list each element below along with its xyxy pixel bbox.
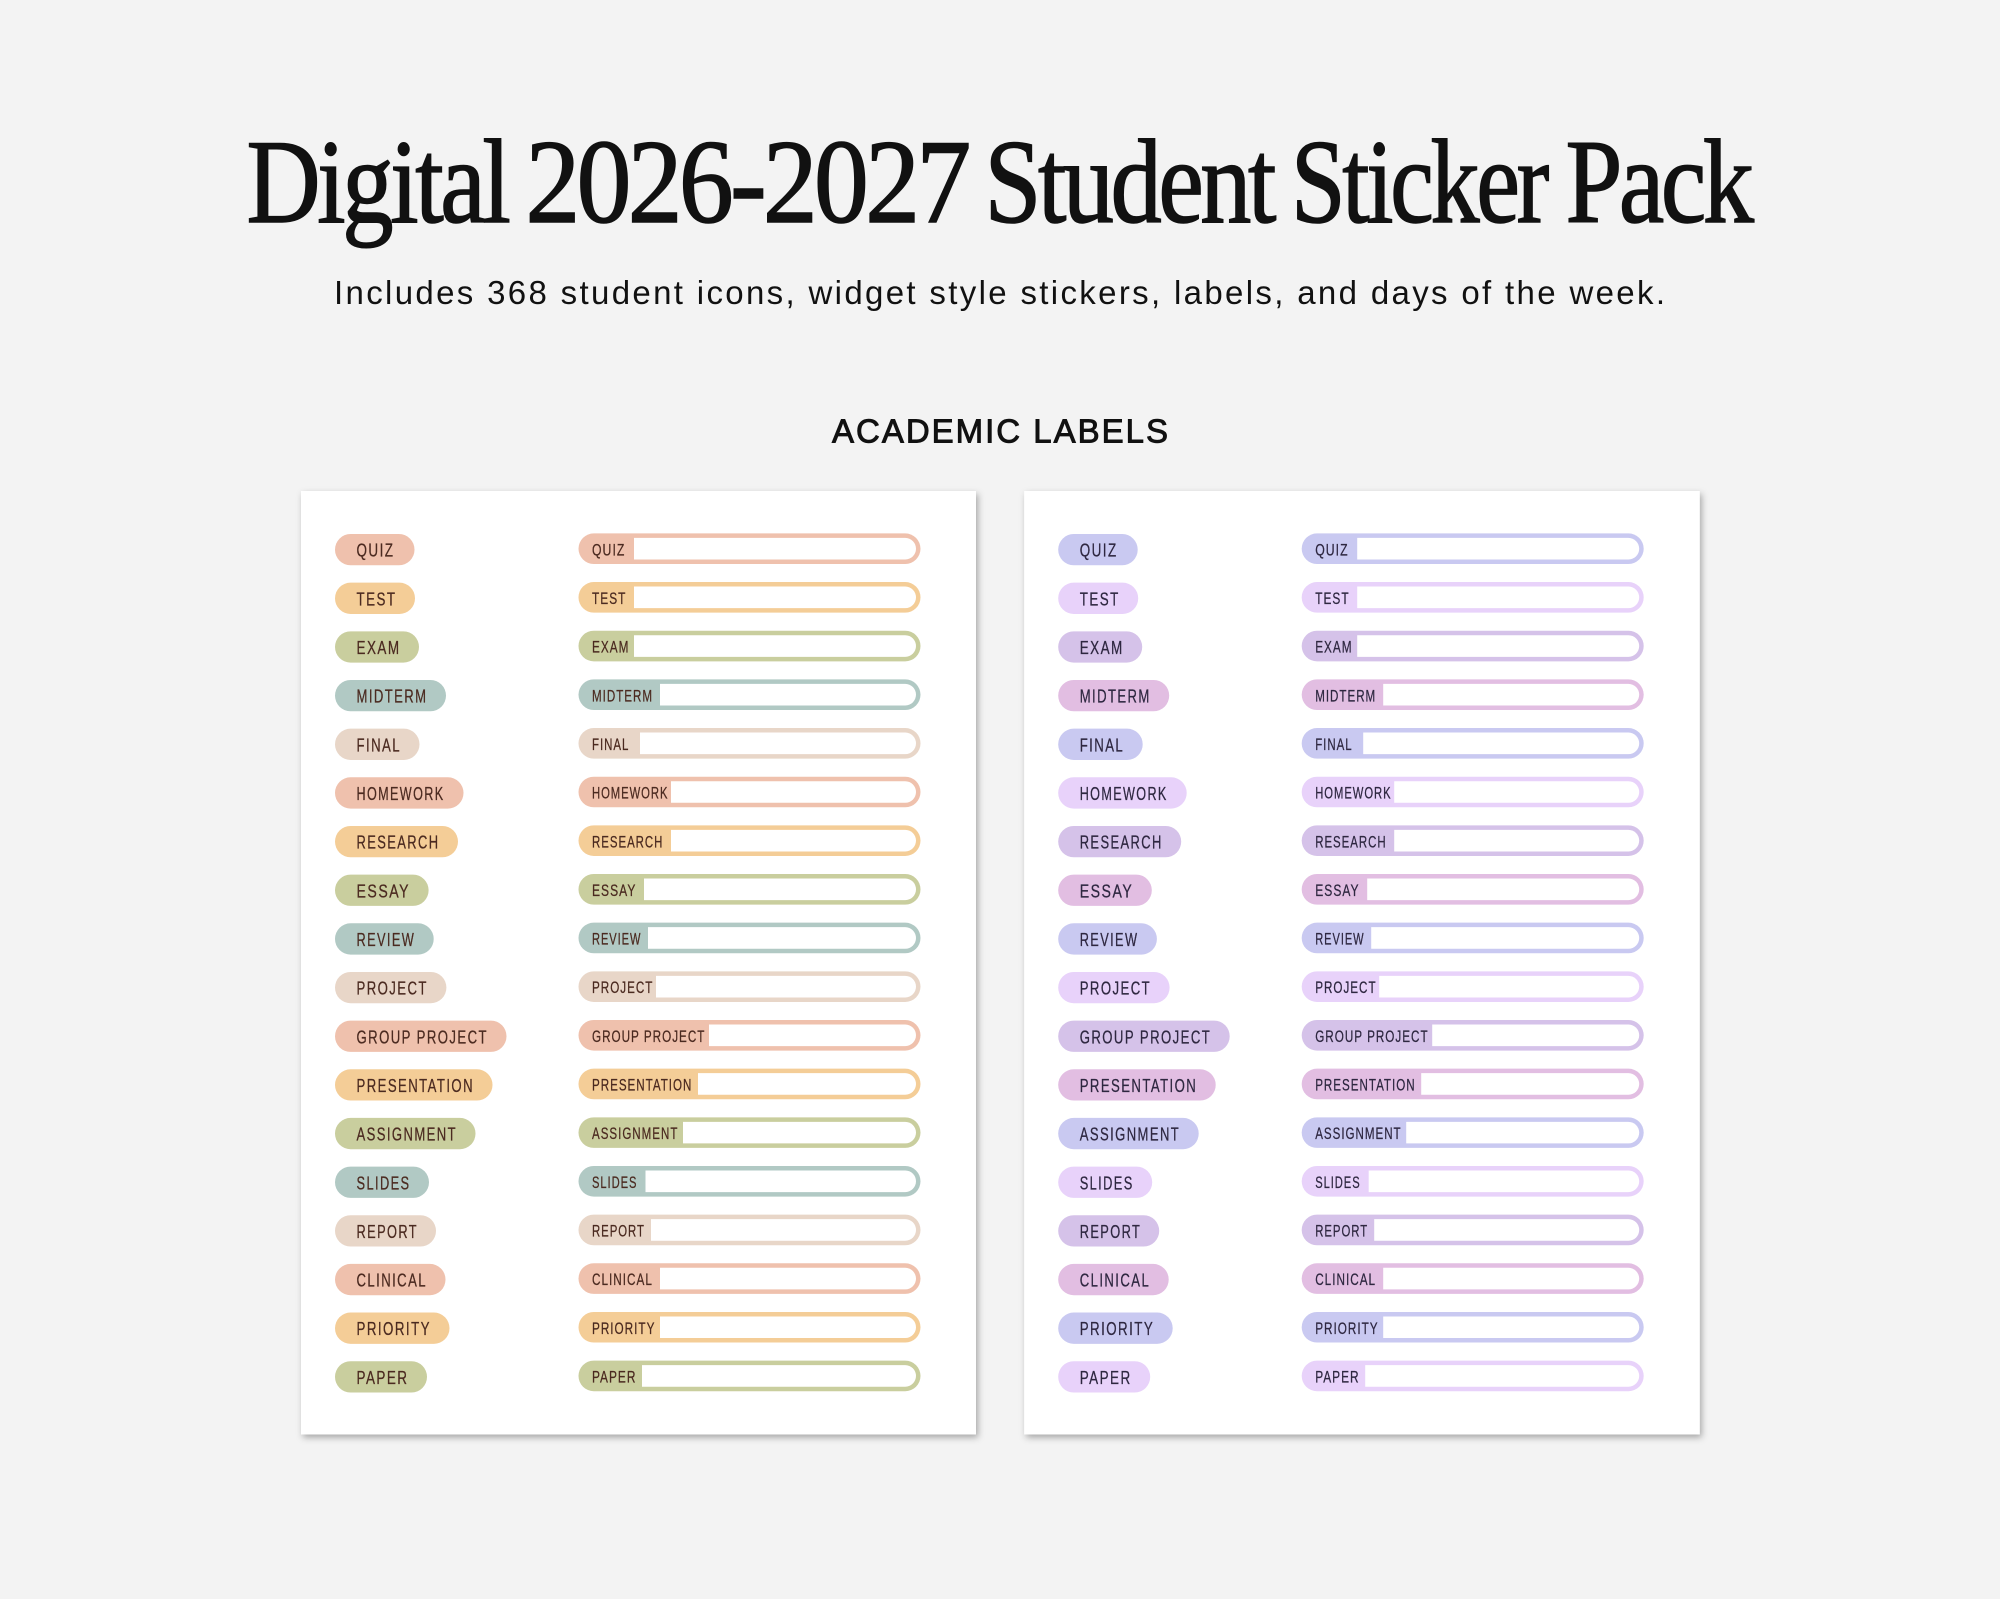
pill: FINAL: FINAL (1080, 734, 1124, 755)
bar: PROJECT: PROJECT (1315, 979, 1377, 997)
bar: CLINICAL: CLINICAL (1315, 1271, 1376, 1289)
pill: TEST (335, 583, 415, 614)
bar: MIDTERM (578, 679, 920, 710)
bar: ASSIGNMENT (578, 1117, 920, 1148)
title: Pack (1566, 115, 1754, 248)
bar: CLINICAL (1302, 1263, 1644, 1294)
pill: MIDTERM: MIDTERM (356, 686, 428, 707)
bar: RESEARCH: RESEARCH (592, 833, 663, 851)
pill: GROUP PROJECT: GROUP PROJECT (1080, 1026, 1211, 1047)
pill: CLINICAL (335, 1264, 446, 1295)
bar: HOMEWORK (1302, 777, 1644, 807)
bar: REPORT (578, 1215, 920, 1245)
bar: ESSAY: ESSAY (592, 882, 636, 900)
pill: PRESENTATION: PRESENTATION (1080, 1075, 1197, 1096)
bar: RESEARCH (1302, 825, 1644, 856)
pill: ESSAY: ESSAY (1080, 880, 1133, 901)
pill: CLINICAL: CLINICAL (356, 1270, 427, 1291)
title: Sticker (1291, 115, 1548, 248)
pill: REVIEW (1058, 923, 1157, 955)
bar: TEST (578, 582, 920, 613)
pill: PAPER (335, 1361, 427, 1393)
bar: PRIORITY: PRIORITY (1315, 1320, 1379, 1338)
bar: CLINICAL (578, 1263, 920, 1294)
pill: PRIORITY (1058, 1313, 1173, 1344)
bar: PAPER (578, 1361, 920, 1391)
bar: SLIDES: SLIDES (1315, 1174, 1361, 1192)
pill: PAPER: PAPER (356, 1367, 408, 1388)
pill: QUIZ (1058, 534, 1138, 565)
pill: HOMEWORK: HOMEWORK (1080, 783, 1168, 804)
pill: EXAM: EXAM (356, 637, 400, 658)
pill: REPORT: REPORT (356, 1221, 418, 1242)
bar: REPORT: REPORT (1315, 1223, 1368, 1241)
pill: RESEARCH: RESEARCH (356, 832, 440, 853)
pill: SLIDES (335, 1167, 429, 1198)
pill: EXAM: EXAM (1080, 637, 1124, 658)
bar: PROJECT (1302, 971, 1644, 1002)
section heading: ACADEMIC LABELS (832, 413, 1168, 450)
bar: TEST: TEST (592, 590, 626, 608)
pill: RESEARCH: RESEARCH (1080, 832, 1163, 853)
bar: ASSIGNMENT (1302, 1117, 1644, 1148)
pill: REPORT (335, 1215, 436, 1247)
bar: ESSAY (578, 874, 920, 905)
panel: warm academic labels (301, 491, 976, 1434)
bar: MIDTERM: MIDTERM (1315, 687, 1376, 705)
pill: MIDTERM: MIDTERM (1080, 686, 1151, 707)
bar: CLINICAL: CLINICAL (592, 1271, 653, 1289)
bar: PROJECT (578, 971, 920, 1002)
pill: PRESENTATION: PRESENTATION (356, 1075, 474, 1096)
bar: FINAL (578, 728, 920, 759)
pill: ESSAY (1058, 875, 1152, 906)
bar: HOMEWORK: HOMEWORK (592, 785, 668, 803)
pill: PRESENTATION (1058, 1069, 1216, 1101)
bar: EXAM (1302, 631, 1644, 661)
pill: ASSIGNMENT: ASSIGNMENT (1080, 1124, 1180, 1145)
bar: FINAL: FINAL (592, 736, 629, 754)
bar: PAPER: PAPER (592, 1369, 636, 1387)
pill: PROJECT (335, 972, 446, 1003)
pill: ASSIGNMENT (1058, 1118, 1199, 1149)
pill: HOMEWORK (1058, 777, 1187, 809)
title: Digital (246, 115, 509, 248)
pill: CLINICAL (1058, 1264, 1169, 1295)
pill: PROJECT: PROJECT (1080, 978, 1151, 999)
pill: GROUP PROJECT: GROUP PROJECT (356, 1026, 488, 1047)
bar: PAPER (1302, 1361, 1644, 1391)
pill: TEST: TEST (356, 588, 396, 609)
pill: SLIDES: SLIDES (1080, 1172, 1134, 1193)
bar: REVIEW (1302, 923, 1644, 953)
bar: FINAL (1302, 728, 1644, 759)
bar: ASSIGNMENT: ASSIGNMENT (1315, 1125, 1402, 1143)
bar: TEST (1302, 582, 1644, 613)
bar: PRESENTATION: PRESENTATION (592, 1077, 692, 1095)
pill: ASSIGNMENT: ASSIGNMENT (356, 1124, 457, 1145)
title: Student (984, 115, 1276, 248)
bar: HOMEWORK: HOMEWORK (1315, 785, 1392, 803)
title: 2026-2027 (526, 115, 968, 248)
bar: GROUP PROJECT (1302, 1020, 1644, 1051)
bar: PRESENTATION: PRESENTATION (1315, 1077, 1416, 1095)
bar: SLIDES (578, 1166, 920, 1197)
bar: QUIZ: QUIZ (1315, 541, 1349, 559)
pill: HOMEWORK: HOMEWORK (356, 783, 444, 804)
pill: PRESENTATION (335, 1069, 492, 1101)
pill: REVIEW: REVIEW (356, 929, 415, 950)
pill: FINAL (335, 729, 420, 760)
bar: GROUP PROJECT (578, 1020, 920, 1051)
pill: QUIZ (335, 534, 414, 565)
pill: PRIORITY (335, 1313, 450, 1344)
bar: GROUP PROJECT: GROUP PROJECT (1315, 1028, 1429, 1046)
pill: RESEARCH (1058, 826, 1181, 857)
pill: TEST (1058, 583, 1138, 614)
pill: GROUP PROJECT (1058, 1021, 1230, 1052)
bar: RESEARCH (578, 825, 920, 856)
bar: PRIORITY: PRIORITY (592, 1320, 655, 1338)
pill: FINAL: FINAL (356, 734, 401, 755)
bar: SLIDES: SLIDES (592, 1174, 637, 1192)
bar: RESEARCH: RESEARCH (1315, 833, 1387, 851)
bar: REVIEW: REVIEW (592, 931, 641, 949)
pill: CLINICAL: CLINICAL (1080, 1270, 1150, 1291)
pill: QUIZ: QUIZ (1080, 540, 1118, 561)
pill: MIDTERM (1058, 680, 1169, 711)
bar: MIDTERM (1302, 679, 1644, 710)
pill: EXAM (1058, 631, 1142, 663)
pill: ESSAY (335, 875, 429, 906)
pill: PRIORITY: PRIORITY (1080, 1318, 1154, 1339)
pill: ASSIGNMENT (335, 1118, 476, 1149)
bar: EXAM: EXAM (592, 639, 629, 657)
pill: GROUP PROJECT (335, 1021, 506, 1052)
bar: SLIDES (1302, 1166, 1644, 1197)
bar: HOMEWORK (578, 777, 920, 807)
pill: ESSAY: ESSAY (356, 880, 410, 901)
pill: REPORT (1058, 1215, 1159, 1247)
pill: TEST: TEST (1080, 588, 1120, 609)
pill: PAPER: PAPER (1080, 1367, 1132, 1388)
bar: QUIZ (1302, 533, 1644, 564)
pill: HOMEWORK (335, 777, 464, 809)
bar: GROUP PROJECT: GROUP PROJECT (592, 1028, 705, 1046)
bar: PRIORITY (578, 1312, 920, 1343)
pill: PRIORITY: PRIORITY (356, 1318, 431, 1339)
title (246, 115, 1754, 248)
bar: REVIEW: REVIEW (1315, 931, 1365, 949)
pill: FINAL (1058, 729, 1143, 760)
bar: REPORT (1302, 1215, 1644, 1245)
pill: REPORT: REPORT (1080, 1221, 1141, 1242)
pill: PAPER (1058, 1361, 1150, 1393)
bar: EXAM: EXAM (1315, 639, 1353, 657)
pill: MIDTERM (335, 680, 446, 711)
bar: FINAL: FINAL (1315, 736, 1353, 754)
bar: ESSAY: ESSAY (1315, 882, 1360, 900)
bar: PRESENTATION (578, 1069, 920, 1099)
bar: REPORT: REPORT (592, 1223, 645, 1241)
bar: REVIEW (578, 923, 920, 953)
pill: QUIZ: QUIZ (356, 540, 394, 561)
bar: MIDTERM: MIDTERM (592, 687, 653, 705)
bar: PROJECT: PROJECT (592, 979, 653, 997)
pill: PROJECT (1058, 972, 1170, 1003)
bar: QUIZ (578, 533, 920, 564)
bar: QUIZ: QUIZ (592, 541, 625, 559)
panel: cool academic labels (1024, 491, 1700, 1434)
bar: PAPER: PAPER (1315, 1369, 1360, 1387)
pill: REVIEW (335, 923, 434, 955)
subtitle: Includes 368 student icons, widget style stickers, labels, and days of the week. (334, 274, 1665, 311)
bar: ESSAY (1302, 874, 1644, 905)
pill: RESEARCH (335, 826, 458, 857)
bar: TEST: TEST (1315, 590, 1350, 608)
bar: PRIORITY (1302, 1312, 1644, 1343)
bar: PRESENTATION (1302, 1069, 1644, 1099)
pill: SLIDES (1058, 1167, 1152, 1198)
pill: PROJECT: PROJECT (356, 978, 428, 999)
pill: SLIDES: SLIDES (356, 1172, 410, 1193)
bar: EXAM (578, 631, 920, 661)
pill: REVIEW: REVIEW (1080, 929, 1138, 950)
pill: EXAM (335, 631, 419, 663)
bar: ASSIGNMENT: ASSIGNMENT (592, 1125, 678, 1143)
